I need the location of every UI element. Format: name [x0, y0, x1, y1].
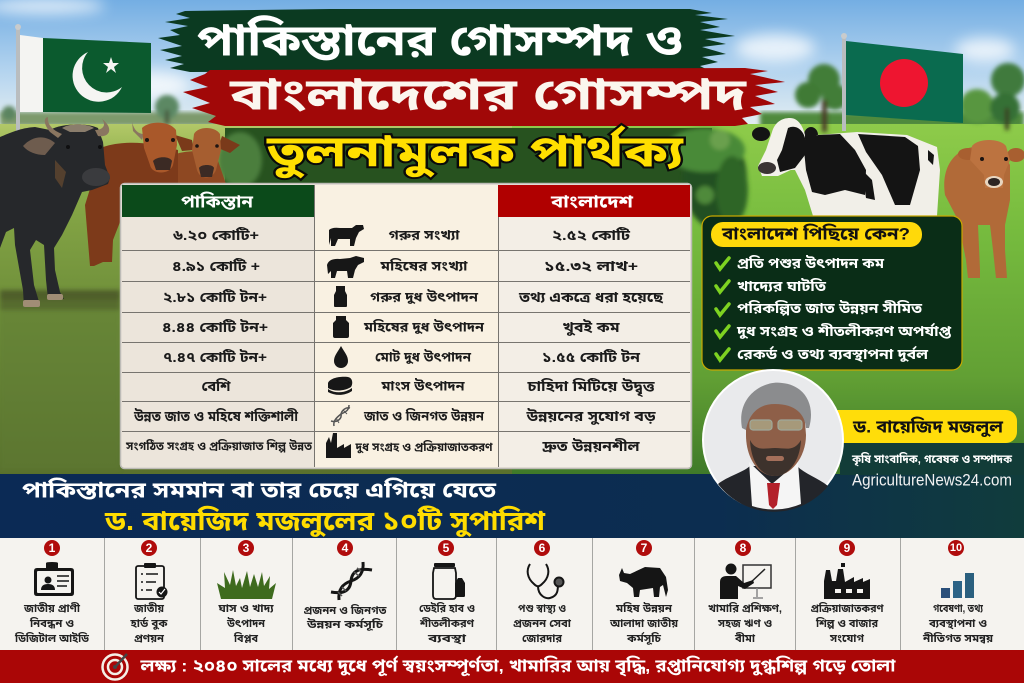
flag: Bangladesh [841, 33, 963, 131]
table column: Bangladesh values: উন্নয়নের সুযোগ বড় [525, 408, 657, 425]
animal: brown calf [944, 140, 1024, 278]
table column: Pakistan values: উন্নত জাত ও মহিষে শক্তিশালী [133, 408, 299, 424]
animal: brown cow front [85, 122, 178, 266]
card 7: buffalo development [609, 540, 678, 646]
table header: Pakistan: পাকিস্তান [181, 192, 253, 212]
card 1: national animal registration [14, 540, 90, 645]
table column: Bangladesh values: ১৫.৩২ লাখ+ [544, 258, 638, 274]
card 5: dairy hub and cooling: ব্যবস্থা [427, 633, 467, 645]
card 8: training, credit, insurance: বীমা [734, 632, 756, 645]
card 3: grass and feed: উৎপাদন [226, 617, 265, 630]
card 10: research and policy: 10 [950, 542, 962, 554]
icon: factory [326, 433, 351, 458]
author portrait [703, 370, 843, 512]
card 5: dairy hub and cooling: ডেইরি হাব ও [419, 602, 476, 615]
table column: indicators: গরুর সংখ্যা [388, 228, 460, 242]
icon: buffalo [327, 256, 364, 278]
card 9: processing and market: 9 [844, 541, 851, 555]
table column: indicators: মহিষের দুধ উৎপাদন [363, 320, 485, 335]
table column: indicators: মহিষের সংখ্যা [379, 258, 468, 274]
background: bushes behind table [218, 128, 748, 228]
checklist: পরিকল্পিত জাত উন্নয়ন সীমিত [737, 300, 922, 316]
table column: Pakistan values: ২.৮১ কোটি টন+ [163, 289, 267, 305]
title banner: green brush [158, 9, 735, 72]
author role: কৃষি সাংবাদিক, গবেষক ও সম্পাদক [851, 451, 1012, 467]
table column: Pakistan values: ৪.৯১ কোটি + [172, 258, 260, 274]
goal bar [0, 650, 1024, 683]
card 3: grass and feed [217, 540, 276, 645]
card 4: breeding and genetics [304, 540, 387, 632]
table column: Bangladesh values: ১.৫৫ কোটি টন [542, 349, 640, 365]
animal: black buffalo [0, 117, 110, 307]
icon: meat [328, 377, 352, 395]
table column: Bangladesh values: ২.৫২ কোটি [552, 227, 630, 243]
card 9: processing and market [810, 540, 884, 645]
panel: why Bangladesh is behind [702, 216, 962, 370]
icon: cow [329, 225, 364, 246]
checklist: রেকর্ড ও তথ্য ব্যবস্থাপনা দুর্বল [737, 345, 928, 362]
card 7: buffalo development: কর্মসূচি [626, 631, 662, 646]
card 6: animal health: পশু স্বাস্থ্য ও [518, 603, 567, 615]
goal text: লক্ষ্য : ২০৪০ সালের মধ্যে দুধে পূর্ণ স্বয়ংসম্পূর্ণতা, খামারির আয় বৃদ্ধি, রপ্তানিযোগ্য দুগ্ধশিল্প গড়ে তোলা [139, 655, 896, 676]
icon: milk can [333, 316, 349, 338]
table column: indicators: মাংস উৎপাদন [380, 378, 466, 394]
card 10: research and policy: গবেষণা, তথ্য [933, 603, 984, 615]
table column: Pakistan values: সংগঠিত সংগ্রহ ও প্রক্রিয়াজাত শিল্প উন্নত [125, 438, 313, 453]
table column: indicators [355, 228, 493, 454]
animal: brown cow rear [173, 128, 240, 186]
band: recommendations heading: পাকিস্তানের সমমান বা তার চেয়ে এগিয়ে যেতে [22, 478, 497, 502]
card 1: national animal registration: জাতীয় প্রাণী [23, 602, 81, 615]
card 3: grass and feed: ঘাস ও খাদ্য [217, 603, 274, 615]
card 7: buffalo development: 7 [641, 541, 648, 555]
card 1: national animal registration: 1 [49, 541, 56, 555]
card 9: processing and market: শিল্প ও বাজার [815, 617, 878, 630]
background: sky and pasture [0, 0, 1024, 484]
table column: indicators: গরুর দুধ উৎপাদন [370, 290, 479, 305]
table column: indicators: মোট দুধ উৎপাদন [375, 350, 472, 365]
table column: indicators: দুধ সংগ্রহ ও প্রক্রিয়াজাতকরণ [355, 439, 493, 454]
table header: Pakistan [122, 185, 314, 217]
card 4: breeding and genetics: উন্নয়ন কর্মসূচি [306, 617, 384, 632]
table column: Pakistan values: ৪.৪৪ কোটি টন+ [162, 319, 268, 335]
recommendation cards [0, 538, 1024, 650]
icon: dna [331, 405, 350, 426]
animal: holstein cow [752, 118, 940, 216]
card 8: training, credit, insurance: 8 [740, 541, 747, 555]
checklist: খাদ্যের ঘাটতি [737, 278, 826, 294]
card 6: animal health: প্রজনন সেবা [513, 618, 572, 630]
table column: Bangladesh values: চাহিদা মিটিয়ে উদ্বৃত্ত [526, 378, 655, 398]
table column: Bangladesh values: খুবই কম [562, 319, 620, 336]
table column: Bangladesh values: দ্রুত উন্নয়নশীল [541, 438, 640, 454]
icon: milk bottle [334, 286, 347, 307]
card 8: training, credit, insurance: খামারি প্রশিক্ষণ, [708, 602, 782, 615]
card 4: breeding and genetics: প্রজনন ও জিনগত [304, 604, 387, 617]
card 8: training, credit, insurance: সহজ ঋণ ও [717, 618, 773, 630]
table column: indicators: জাত ও জিনগত উন্নয়ন [363, 408, 485, 424]
author block [703, 370, 1017, 512]
card 10: research and policy: ব্যবস্থাপনা ও [928, 618, 988, 630]
table header: Bangladesh: বাংলাদেশ [550, 192, 634, 212]
card 9: processing and market: সংযোগ [829, 633, 864, 645]
table column: Pakistan values [125, 227, 313, 453]
title line two: বাংলাদেশের গোসম্পদ [229, 70, 747, 120]
card 5: dairy hub and cooling [419, 540, 476, 645]
table column: Bangladesh values: তথ্য একত্রে ধরা হয়েছে [518, 289, 664, 305]
comparison table [120, 184, 692, 468]
checklist [716, 255, 952, 362]
card 3: grass and feed: 3 [243, 541, 250, 555]
table column: Pakistan values: বেশি [202, 378, 232, 394]
table column: Bangladesh values [518, 227, 664, 454]
title banner: red brush [183, 68, 785, 126]
card 2: national herd book [129, 540, 169, 645]
table header: Bangladesh [498, 185, 690, 217]
card 1: national animal registration: ডিজিটাল আইডি [14, 632, 90, 645]
card 7: buffalo development: মহিষ উন্নয়ন [615, 602, 672, 615]
card 1: national animal registration: নিবন্ধন ও [29, 617, 75, 630]
card 10: research and policy: নীতিগত সমন্বয় [922, 632, 993, 645]
card 2: national herd book: 2 [146, 541, 153, 555]
table column: Pakistan values: ৬.২০ কোটি+ [173, 227, 259, 243]
checklist: প্রতি পশুর উৎপাদন কম [737, 255, 884, 271]
author name pill: ড. বায়েজিদ মজলুল [852, 416, 1004, 438]
flag: Pakistan [15, 24, 151, 135]
card 2: national herd book: প্রণয়ন [134, 633, 164, 645]
author name pill [820, 410, 1017, 443]
card 7: buffalo development: আলাদা জাতীয় [609, 617, 678, 630]
card 6: animal health: 6 [539, 541, 546, 555]
card 10: research and policy [922, 540, 993, 645]
panel heading pill [711, 222, 922, 247]
table column: Pakistan values: ৭.৪৭ কোটি টন+ [163, 349, 267, 365]
band: recommendations heading: ড. বায়েজিদ মজলুলের ১০টি সুপারিশ [104, 505, 546, 538]
card 2: national herd book: হার্ড বুক [129, 616, 169, 630]
card 5: dairy hub and cooling: শীতলীকরণ [419, 617, 475, 630]
card 9: processing and market: প্রক্রিয়াজাতকরণ [810, 602, 884, 615]
checklist: দুধ সংগ্রহ ও শীতলীকরণ অপর্যাপ্ত [736, 322, 952, 340]
card 6: animal health: জোরদার [522, 633, 562, 645]
card 5: dairy hub and cooling: 5 [443, 541, 450, 555]
card 4: breeding and genetics: 4 [342, 541, 349, 555]
icon: milk drop [334, 346, 348, 368]
card 8: training, credit, insurance [708, 540, 782, 645]
card 3: grass and feed: বিপ্লব [233, 632, 258, 645]
panel heading pill: বাংলাদেশ পিছিয়ে কেন? [721, 224, 910, 244]
title line one: পাকিস্তানের গোসম্পদ ও [197, 16, 683, 66]
card 2: national herd book: জাতীয় [133, 602, 164, 615]
band: recommendations heading [0, 443, 1024, 538]
title: comparison: তুলনামুলক পার্থক্য [266, 125, 684, 178]
icon: target [102, 654, 128, 680]
card 6: animal health [513, 540, 572, 645]
